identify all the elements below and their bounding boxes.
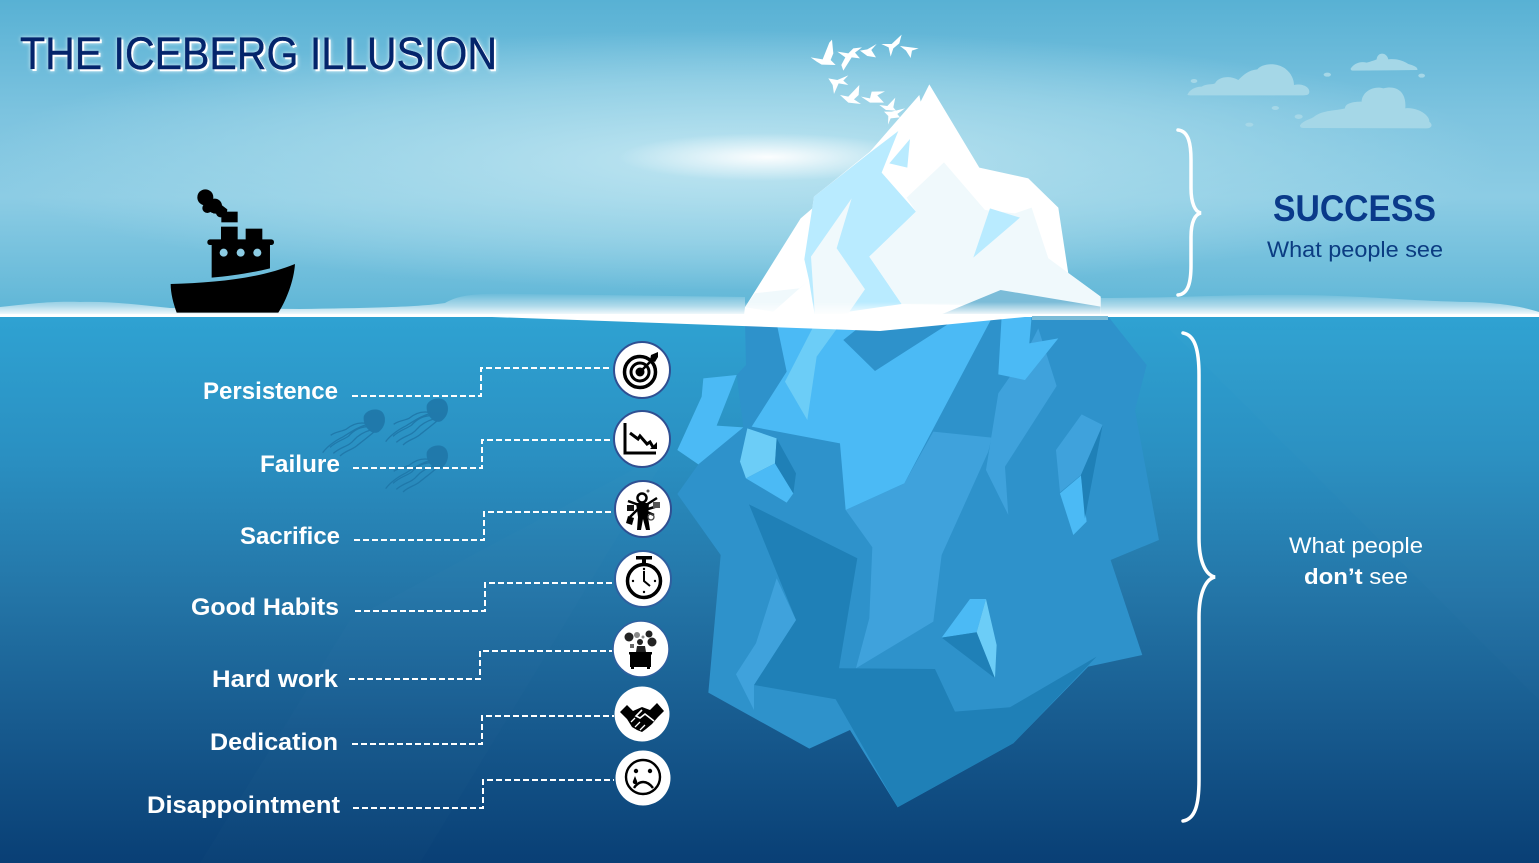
brace: success [1178, 130, 1201, 295]
faint underwater rays [200, 330, 1539, 863]
connector: disappointment [353, 780, 614, 808]
row: good habits [191, 551, 671, 621]
iceberg below water [677, 317, 1159, 807]
connector: hard work [349, 651, 612, 679]
gem left [740, 428, 796, 503]
waterline reflection strip [1032, 316, 1108, 320]
jellyfish right [386, 399, 448, 445]
text: what people: What people [1289, 533, 1423, 558]
cloud puffs [1191, 73, 1425, 127]
funnel and smoke [221, 212, 238, 222]
birds flock [811, 35, 919, 125]
row: disappointment [147, 750, 670, 819]
label: hard work: Hard work [212, 666, 339, 693]
pale lower-left facet [745, 280, 809, 312]
pale facet main [869, 162, 1101, 307]
portholes [220, 249, 228, 257]
icon: falling chart [614, 411, 670, 467]
icon: target [614, 342, 670, 398]
ship [171, 189, 295, 313]
icon: stopwatch [615, 551, 671, 607]
distant shoreline [0, 294, 1539, 317]
hull [171, 264, 295, 313]
sky background [0, 0, 1539, 318]
light blue facet [804, 131, 916, 317]
label: failure: Failure [260, 451, 340, 478]
dark lower facet [749, 504, 1097, 807]
connector: failure [353, 440, 613, 468]
icon: busy figure [615, 481, 671, 537]
cabin [212, 245, 270, 278]
horizon line [0, 314, 1539, 317]
row: hard work [212, 621, 669, 693]
title: THE ICEBERG ILLUSION [20, 28, 497, 79]
icon: busy desk [613, 621, 669, 677]
sun glow [618, 133, 918, 181]
text: what people see: What people see [1267, 237, 1443, 262]
mid facet centre [846, 432, 992, 668]
connector: dedication [352, 716, 614, 744]
pale facet left [811, 198, 865, 317]
jellyfish group [323, 399, 448, 492]
blue triangle facet [973, 208, 1020, 258]
label: persistence: Persistence [203, 378, 338, 405]
heading: success: SUCCESS [1273, 188, 1436, 229]
label: disappointment: Disappointment [147, 792, 340, 819]
bright top facet [752, 318, 992, 510]
sea [0, 317, 1539, 863]
connector: sacrifice [354, 512, 614, 540]
gem right [1056, 414, 1103, 535]
clouds [1187, 54, 1432, 128]
iceberg above water [743, 84, 1101, 320]
gem lower [942, 599, 997, 678]
mid facet lower left [736, 578, 796, 710]
jellyfish left [323, 410, 385, 456]
icon: sad face [616, 750, 670, 806]
jellyfish lower [386, 446, 448, 492]
row: failure [260, 411, 670, 478]
row: sacrifice [240, 481, 671, 550]
row: dedication [210, 686, 670, 756]
brace: hidden [1183, 333, 1215, 821]
label: good habits: Good Habits [191, 594, 339, 621]
iceberg white silhouette [743, 84, 1101, 320]
icon: handshake [614, 686, 670, 742]
label: sacrifice: Sacrifice [240, 523, 340, 550]
mid facet upper right [986, 328, 1057, 515]
main body [677, 317, 1159, 807]
row: persistence [203, 342, 670, 405]
cloud: lower right [1300, 87, 1432, 128]
light streak [785, 327, 838, 420]
bright left tile [677, 375, 743, 464]
connector: persistence [352, 368, 612, 396]
shadow facet at waterline [940, 290, 1101, 320]
white waterline band [465, 316, 1035, 331]
bright top right facet [998, 317, 1058, 380]
waterline glow [745, 302, 1100, 317]
small blue facet [889, 139, 910, 168]
connector: good habits [355, 583, 615, 611]
label: dedication: Dedication [210, 729, 338, 756]
cloud: left [1187, 64, 1309, 95]
text: don't see: don’t see [1304, 564, 1408, 589]
cloud: upper right [1351, 54, 1417, 71]
